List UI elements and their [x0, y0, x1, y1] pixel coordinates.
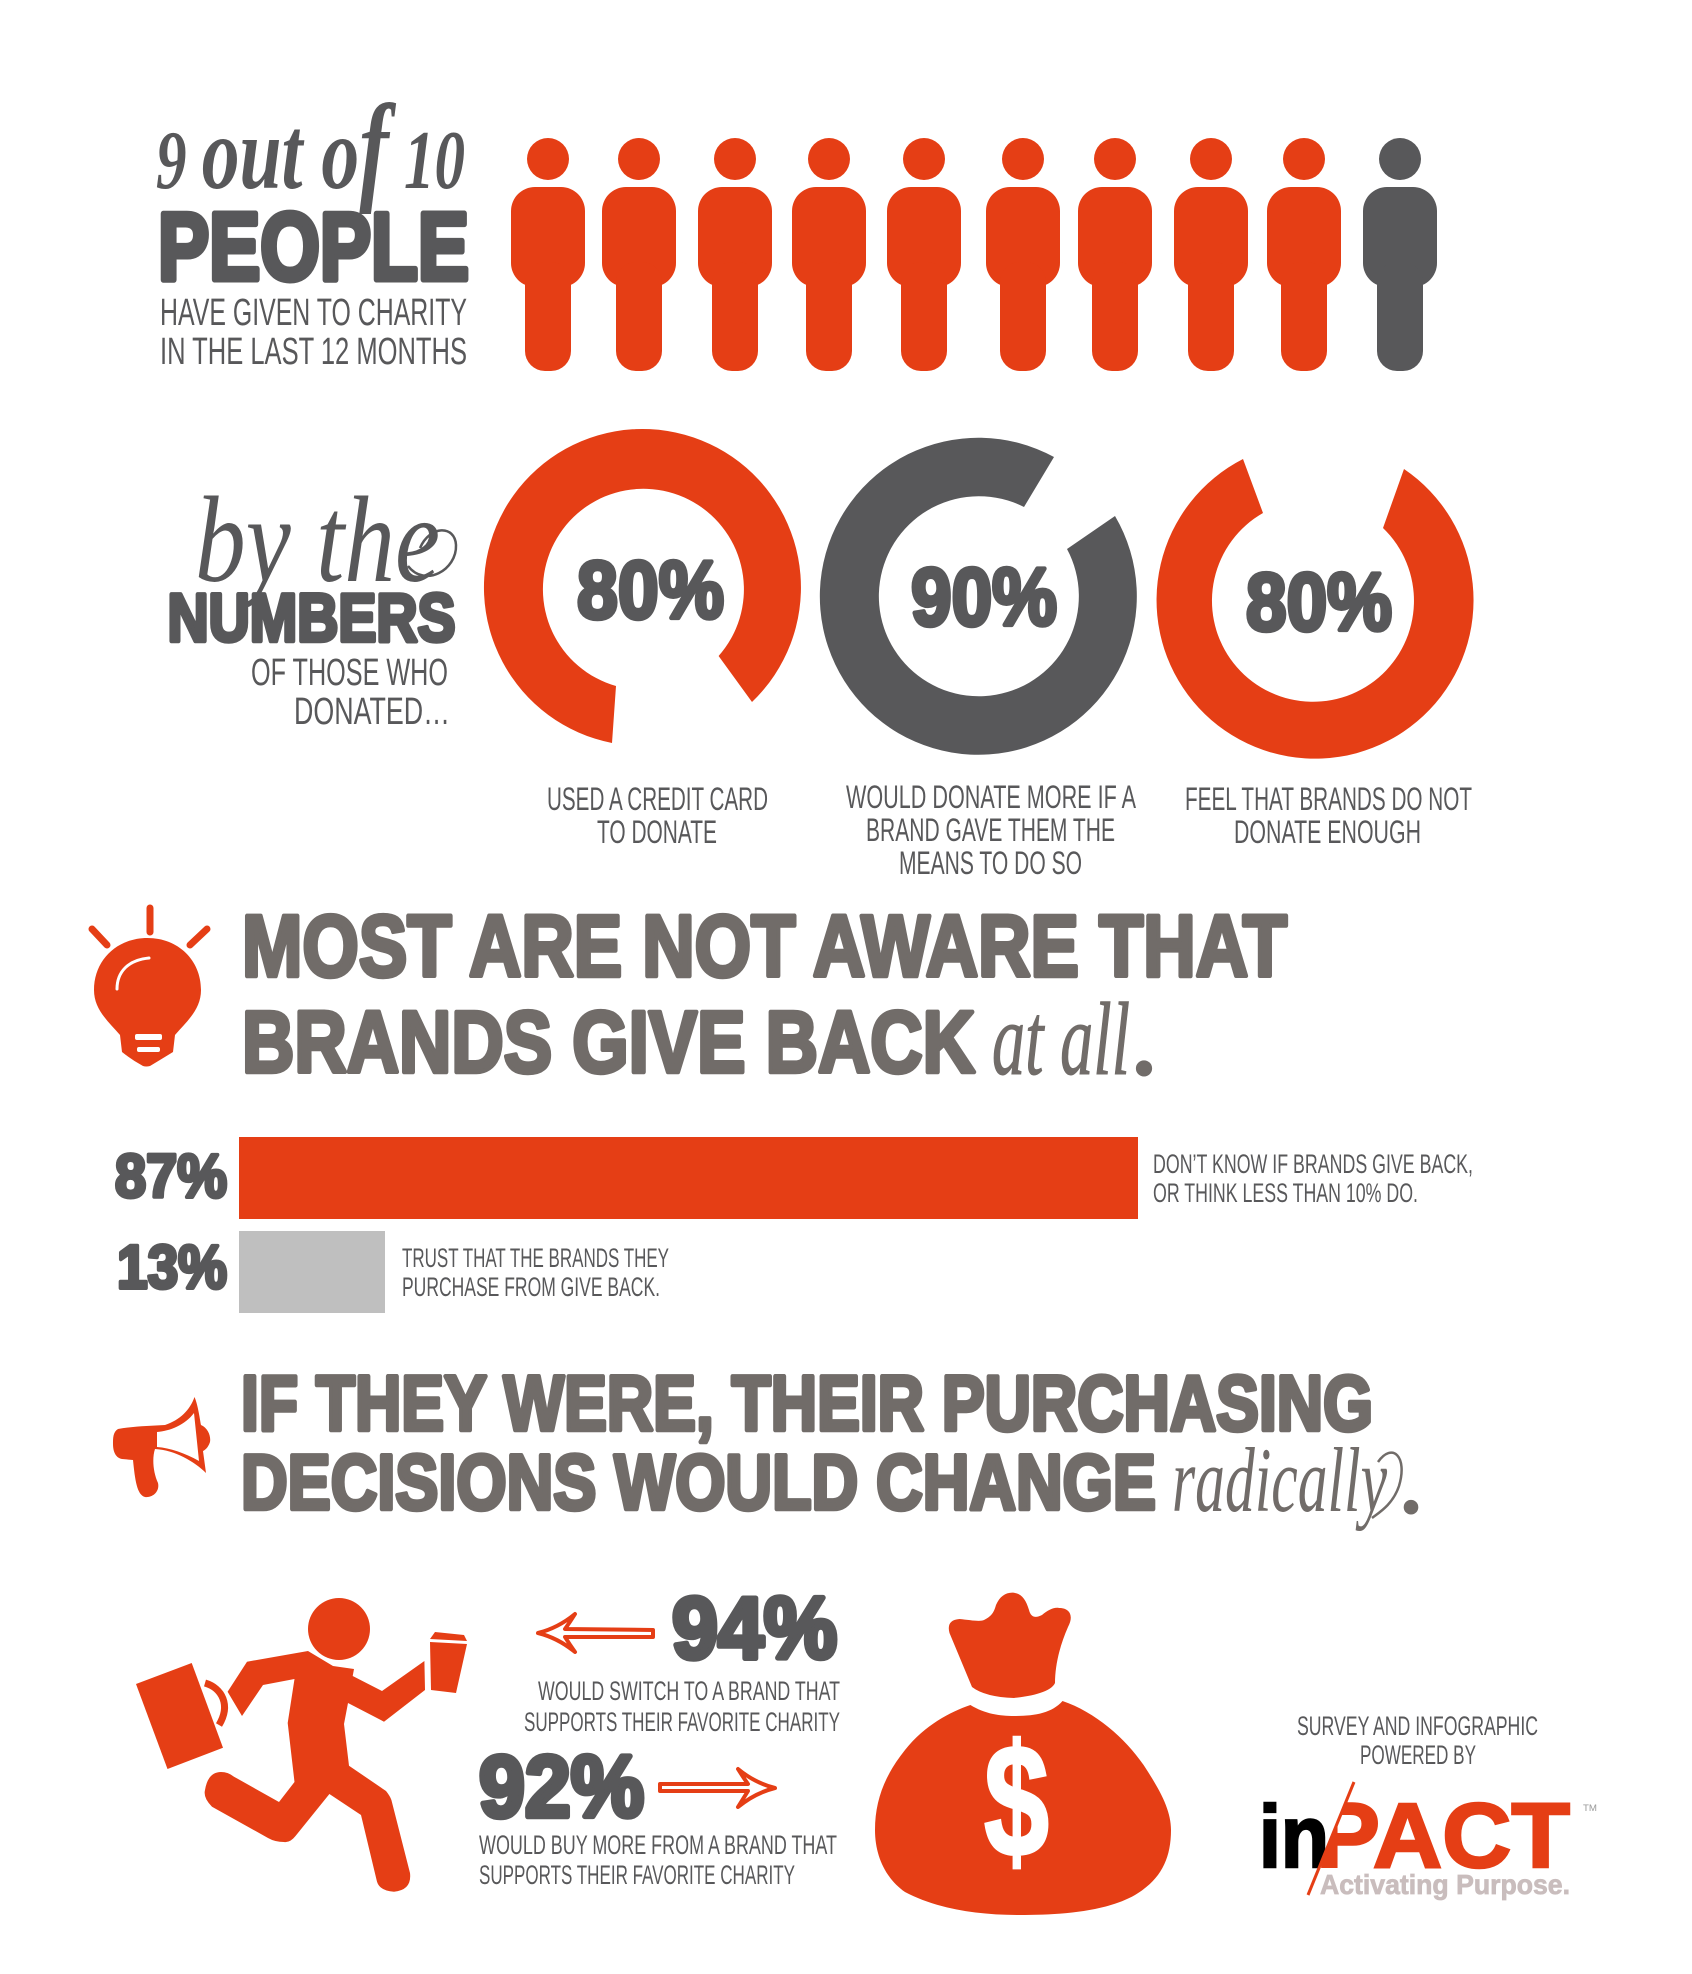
heading: people: PEOPLE	[158, 194, 469, 300]
caption: would donate more: WOULD DONATE MORE IF A	[846, 779, 1136, 815]
logo: inPACT: PACT	[1316, 1785, 1570, 1887]
text: of those who donated	[251, 652, 450, 733]
bar chart: awareness	[115, 1137, 1473, 1313]
icon: running man with briefcase and coffee	[136, 1598, 467, 1892]
label: trust: PURCHASE FROM GIVE BACK.	[402, 1272, 660, 1302]
text: of those who donated: DONATED…	[294, 691, 450, 733]
heading: if they were their purchasing decisions would change radically: IF THEY WERE, THEIR PURCHASING	[241, 1361, 1373, 1447]
text: would switch	[524, 1676, 840, 1737]
label: don't know: OR THINK LESS THAN 10% DO.	[1153, 1178, 1418, 1208]
icon: light bulb	[92, 908, 207, 1066]
heading: by the: by the	[195, 471, 440, 608]
text: would buy more: SUPPORTS THEIR FAVORITE CHARITY	[479, 1860, 795, 1890]
text: would switch: WOULD SWITCH TO A BRAND THAT	[538, 1676, 840, 1706]
donut chart: 80% credit card	[484, 429, 801, 743]
text: would switch: SUPPORTS THEIR FAVORITE CHARITY	[524, 1707, 840, 1737]
label: trust	[402, 1243, 669, 1302]
heading: if they were their purchasing decisions would change radically: DECISIONS WOULD CHANGE	[241, 1440, 1156, 1526]
caption: feel that brands do not donate enough: DONATE ENOUGH	[1234, 814, 1421, 850]
text: survey and infographic powered by	[1297, 1711, 1538, 1770]
stat: 94% with arrow	[524, 1580, 840, 1737]
icon: dollar sign: $	[984, 1711, 1049, 1890]
donut chart: 90% would donate more	[820, 438, 1137, 755]
donut chart: 80% credit card: 80%	[577, 545, 724, 636]
caption: used a credit card: USED A CREDIT CARD	[547, 781, 768, 817]
heading: most are not aware that brands give back at all: BRANDS GIVE BACK	[242, 993, 975, 1091]
caption: feel that brands do not donate enough: FEEL THAT BRANDS DO NOT	[1185, 781, 1472, 817]
caption: used a credit card: TO DONATE	[597, 814, 717, 850]
bar: 87%	[239, 1137, 1138, 1219]
logo: inPACT	[1259, 1782, 1597, 1900]
logo: inPACT: in	[1259, 1787, 1329, 1886]
heading: if they were their purchasing decisions would change radically	[241, 1361, 1422, 1533]
heading: if they were their purchasing decisions would change radically: radically	[1172, 1429, 1387, 1531]
icon: money bag	[875, 1593, 1171, 1915]
donut chart: 90% would donate more: 90%	[911, 552, 1057, 643]
text: have given to charity: HAVE GIVEN TO CHARITY	[160, 292, 467, 334]
text: have given to charity	[160, 292, 467, 373]
donut chart: 80% brands do not donate enough: 80%	[1246, 557, 1392, 648]
text: survey and infographic powered by: POWERED BY	[1360, 1740, 1476, 1770]
panel: brand switching	[136, 1580, 1597, 1915]
heading: most are not aware that brands give back at all: at all	[992, 982, 1130, 1097]
panel: most are not aware	[92, 897, 1473, 1313]
heading: most are not aware that brands give back at all: MOST ARE NOT AWARE THAT	[242, 897, 1287, 995]
value: 87%: 87%	[115, 1142, 227, 1210]
text: would buy more	[479, 1830, 837, 1890]
label: trust: TRUST THAT THE BRANDS THEY	[402, 1243, 669, 1273]
label: don't know	[1153, 1149, 1473, 1208]
caption: would donate more	[846, 779, 1136, 881]
icon: megaphone	[113, 1397, 210, 1497]
panel: 9 out of 10 people	[156, 80, 1437, 373]
arrow: right	[660, 1769, 775, 1807]
logo: inPACT: TM	[1583, 1803, 1597, 1813]
heading: most are not aware that brands give back at all: .	[1132, 986, 1156, 1097]
heading: 9 out of 10: 9 out of 10	[156, 80, 465, 215]
text: have given to charity: IN THE LAST 12 MONTHS	[160, 331, 467, 373]
caption: would donate more: BRAND GAVE THEM THE	[866, 812, 1115, 848]
bar: 13%	[239, 1231, 385, 1313]
panel: by the numbers	[168, 429, 1474, 881]
text: would buy more: WOULD BUY MORE FROM A BRAND THAT	[479, 1830, 837, 1860]
panel: purchasing decisions	[113, 1361, 1422, 1533]
heading: numbers: NUMBERS	[168, 580, 456, 656]
icon row: ten people, nine highlighted	[511, 138, 1437, 371]
stat: 92% with arrow: 92%	[479, 1738, 644, 1836]
logo: inPACT: Activating Purpose.	[1320, 1869, 1570, 1900]
stat: 92% with arrow	[479, 1738, 837, 1890]
stat: 94% with arrow: 94%	[672, 1580, 837, 1677]
caption: would donate more: MEANS TO DO SO	[899, 845, 1082, 881]
text: of those who donated: OF THOSE WHO	[251, 652, 448, 694]
heading: most are not aware that brands give back at all	[242, 897, 1287, 1097]
caption: feel that brands do not donate enough	[1185, 781, 1472, 850]
caption: used a credit card	[547, 781, 768, 850]
value: 13%: 13%	[117, 1233, 227, 1301]
label: don't know: DON’T KNOW IF BRANDS GIVE BACK,	[1153, 1149, 1473, 1179]
arrow: left	[538, 1614, 653, 1652]
donut chart: 80% brands do not donate enough	[1157, 459, 1474, 759]
text: survey and infographic powered by: SURVEY AND INFOGRAPHIC	[1297, 1711, 1538, 1741]
heading: if they were their purchasing decisions would change radically: .	[1400, 1434, 1422, 1533]
